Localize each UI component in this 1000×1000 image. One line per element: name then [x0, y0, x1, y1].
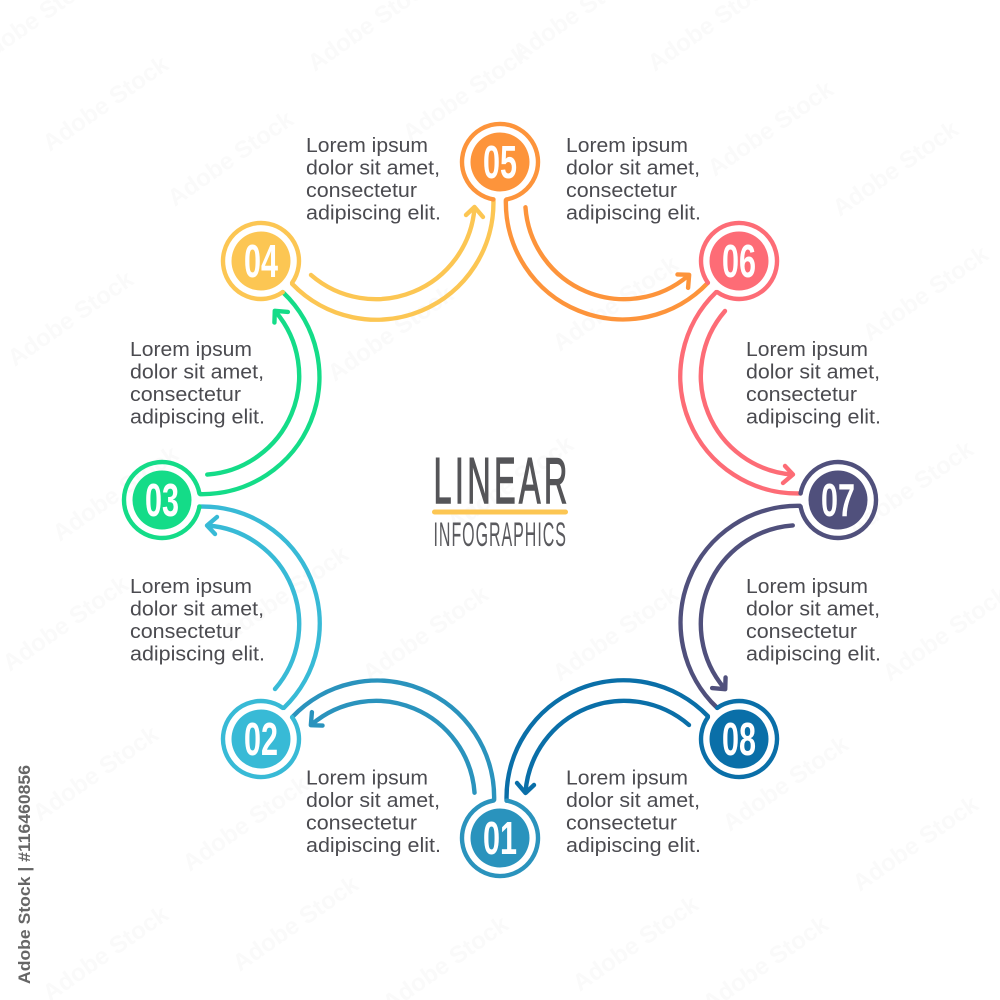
- node 02: 02: [244, 713, 278, 765]
- watermark: faint stock text: Adobe Stock: [703, 75, 839, 182]
- node 03: [124, 462, 199, 538]
- text block: upper right: consectetur: [746, 384, 857, 406]
- text block: top right: adipiscing elit.: [566, 202, 701, 224]
- text block: top left: consectetur: [306, 180, 417, 202]
- text block: lower left: [130, 576, 265, 666]
- watermark: faint stock text: Adobe Stock: [3, 265, 139, 372]
- watermark: faint stock text: Adobe Stock: [38, 50, 174, 157]
- text block: top right: dolor sit amet,: [566, 158, 700, 180]
- text block: lower right: Lorem ipsum: [746, 576, 868, 598]
- text block: bottom right: adipiscing elit.: [566, 835, 701, 857]
- arrow: 04 to 05: [292, 199, 493, 320]
- node 08: 08: [722, 713, 756, 765]
- watermark: faint stock text: Adobe Stock: [848, 790, 984, 897]
- text block: bottom left: dolor sit amet,: [306, 790, 440, 812]
- watermark: faint stock text: Adobe Stock: [0, 570, 134, 677]
- text block: upper left: [130, 339, 265, 428]
- watermark: faint stock text: Adobe Stock: [358, 580, 494, 687]
- text block: upper left: adipiscing elit.: [130, 406, 265, 428]
- arrow: 05 to 06: [480, 140, 708, 368]
- text block: lower left: consectetur: [130, 621, 241, 643]
- watermark: faint stock text: Adobe Stock: [228, 870, 364, 977]
- text block: bottom left: adipiscing elit.: [306, 835, 441, 857]
- text block: lower right: [746, 576, 881, 666]
- text block: lower right: dolor sit amet,: [746, 598, 880, 620]
- node 06: [686, 207, 793, 314]
- watermark: faint stock text: Adobe Stock: [843, 435, 979, 542]
- text block: top left: dolor sit amet,: [306, 158, 440, 180]
- node 04: 04: [244, 235, 278, 287]
- title: LINEAR: LINEAR: [434, 444, 571, 517]
- subtitle: INFOGRAPHICS: INFOGRAPHICS: [434, 515, 567, 554]
- text block: upper right: dolor sit amet,: [746, 362, 880, 384]
- text block: upper left: Lorem ipsum: [130, 339, 252, 361]
- watermark: faint stock text: Adobe Stock: [828, 115, 964, 222]
- arrow: 08 to 01: [507, 680, 708, 801]
- text block: upper left: dolor sit amet,: [130, 362, 264, 384]
- node 05: 05: [483, 136, 517, 188]
- title underline: [432, 510, 568, 514]
- text block: top right: Lorem ipsum: [566, 135, 688, 157]
- node 05: [462, 124, 538, 199]
- watermark: faint stock text: Adobe Stock: [48, 440, 184, 547]
- text block: top left: Lorem ipsum: [306, 135, 428, 157]
- text block: bottom left: consectetur: [306, 812, 417, 834]
- arrow: 07 to 08: [632, 480, 860, 708]
- node 07: [801, 462, 876, 538]
- text block: lower right: adipiscing elit.: [746, 644, 881, 666]
- text block: upper left: consectetur: [130, 384, 241, 406]
- text block: bottom right: Lorem ipsum: [566, 768, 688, 790]
- node 01: [462, 801, 538, 876]
- watermark: faint stock text: Adobe Stock: [163, 105, 299, 212]
- watermark: faint stock text: Adobe Stock: [323, 280, 459, 387]
- text block: bottom right: dolor sit amet,: [566, 790, 700, 812]
- text block: upper right: [746, 339, 881, 428]
- node 06: 06: [722, 235, 756, 287]
- text block: top left: adipiscing elit.: [306, 202, 441, 224]
- text block: top left: [306, 135, 441, 224]
- watermark: faint stock text: Adobe Stock: [858, 240, 994, 347]
- text block: bottom left: [306, 768, 441, 857]
- arrow: 02 to 03: [199, 507, 320, 708]
- watermark: faint stock text: Adobe Stock: [548, 250, 684, 357]
- node 03: 03: [145, 474, 179, 526]
- watermark: faint stock text: Adobe Stock: [28, 720, 164, 827]
- text block: lower right: consectetur: [746, 621, 857, 643]
- watermark: faint stock text: Adobe Stock: [443, 430, 579, 537]
- text block: lower left: adipiscing elit.: [130, 644, 265, 666]
- arrow: 03 to 04: [140, 292, 368, 520]
- node 02: [207, 686, 314, 793]
- node 04: [207, 207, 314, 314]
- arrow: 06 to 07: [680, 292, 801, 493]
- watermark: faint stock text: Adobe Stock: [718, 730, 854, 837]
- watermark: faint stock text: Adobe Stock: [398, 40, 534, 147]
- text block: lower left: Lorem ipsum: [130, 576, 252, 598]
- text block: bottom right: [566, 768, 701, 857]
- watermark: faint stock text: Adobe Stock: [548, 580, 684, 687]
- text block: lower left: dolor sit amet,: [130, 598, 264, 620]
- arrow: 01 to 02: [292, 632, 520, 860]
- node 01: 01: [483, 812, 517, 864]
- text block: top right: consectetur: [566, 180, 677, 202]
- watermark: faint stock text: Adobe Stock: [218, 540, 354, 647]
- text block: upper right: adipiscing elit.: [746, 406, 881, 428]
- text block: top right: [566, 135, 701, 224]
- node 08: [686, 686, 793, 793]
- credit: vertical stock id: Adobe Stock | #116460856: [15, 765, 34, 984]
- text block: bottom left: Lorem ipsum: [306, 768, 428, 790]
- text block: bottom right: consectetur: [566, 812, 677, 834]
- text block: upper right: Lorem ipsum: [746, 339, 868, 361]
- watermark: faint stock text: Adobe Stock: [178, 770, 314, 877]
- node 07: 07: [821, 474, 855, 526]
- watermark: faint stock text: Adobe Stock: [568, 890, 704, 997]
